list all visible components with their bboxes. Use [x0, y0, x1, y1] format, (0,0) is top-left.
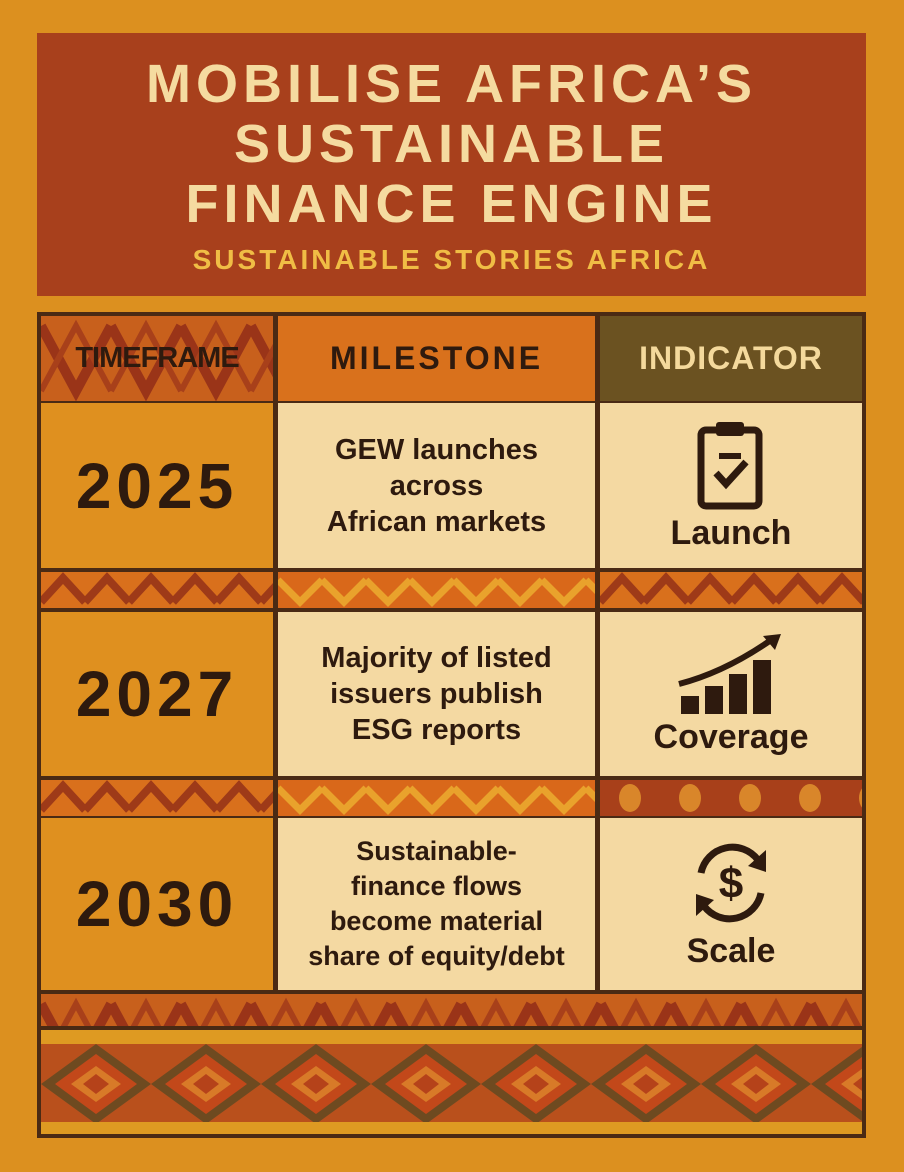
title: [146, 54, 757, 234]
header: milestone: MILESTONE: [330, 340, 543, 376]
band 1: [41, 572, 862, 608]
table: [37, 312, 866, 1138]
row 2027: ESG reports: [352, 714, 521, 746]
row 2025: [41, 403, 862, 568]
title panel: [37, 33, 866, 296]
row 2030: [41, 818, 862, 990]
row 2027: 2027: [76, 658, 238, 730]
row 2030: finance flows: [351, 871, 522, 901]
row 2027: Majority of listed: [321, 642, 552, 674]
band 3: [41, 994, 862, 1026]
header: indicator: [600, 316, 862, 401]
icon: dollar cycle: $: [719, 858, 743, 908]
icon: bar chart: [678, 634, 781, 714]
header: indicator: INDICATOR: [639, 340, 823, 376]
band 2: [41, 780, 862, 816]
header: timeframe: TIMEFRAME: [75, 342, 239, 374]
title: SUSTAINABLE: [234, 114, 669, 174]
bottom pattern band: [41, 1030, 862, 1134]
row 2027: issuers publish: [330, 678, 543, 710]
row 2030: Scale: [687, 932, 775, 970]
row 2025: 2025: [76, 450, 238, 522]
row 2027: Coverage: [654, 718, 808, 756]
row 2030: 2030: [76, 868, 238, 940]
row 2030: Sustainable-: [356, 836, 517, 866]
header: milestone: [278, 316, 595, 401]
row 2025: across: [390, 470, 483, 502]
row 2025: African markets: [327, 506, 546, 538]
title: FINANCE ENGINE: [185, 174, 718, 234]
row 2030: share of equity/debt: [308, 941, 565, 971]
icon: dollar cycle: [696, 844, 766, 922]
row 2025: Launch: [671, 514, 791, 552]
row 2027: [41, 612, 862, 776]
title: MOBILISE AFRICA’S: [146, 54, 757, 114]
header: timeframe: [41, 316, 273, 401]
row 2030: become material: [330, 906, 543, 936]
icon: clipboard: [698, 422, 762, 510]
row 2025: GEW launches: [335, 434, 538, 466]
subtitle: SUSTAINABLE STORIES AFRICA: [193, 244, 710, 274]
